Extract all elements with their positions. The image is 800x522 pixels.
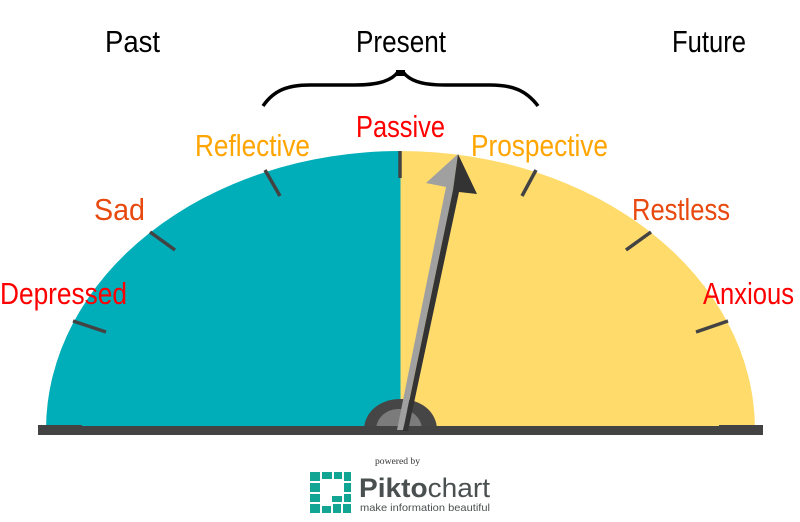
- label: reflective: Reflective: [195, 128, 310, 163]
- label: passive: Passive: [356, 109, 445, 144]
- powered by text: powered by: [375, 456, 421, 466]
- tick marks: [73, 151, 728, 332]
- brace over present: [263, 70, 538, 106]
- hub: [364, 399, 437, 430]
- label: prospective: Prospective: [471, 128, 608, 163]
- gauge right half: future: [400, 151, 755, 430]
- wordmark: piktochart: Piktochart: [359, 473, 491, 503]
- label: sad: Sad: [94, 192, 145, 227]
- heading: present: Present: [356, 24, 446, 59]
- heading: past: Past: [105, 24, 160, 59]
- label: restless: Restless: [632, 192, 730, 227]
- heading: future: Future: [672, 24, 746, 59]
- needle: [397, 154, 477, 431]
- label: depressed: Depressed: [0, 276, 127, 311]
- base bar: [38, 425, 763, 435]
- tagline: make information beautiful: [360, 502, 490, 514]
- gauge left half: past: [46, 151, 400, 430]
- icon: piktochart logo: [310, 472, 351, 513]
